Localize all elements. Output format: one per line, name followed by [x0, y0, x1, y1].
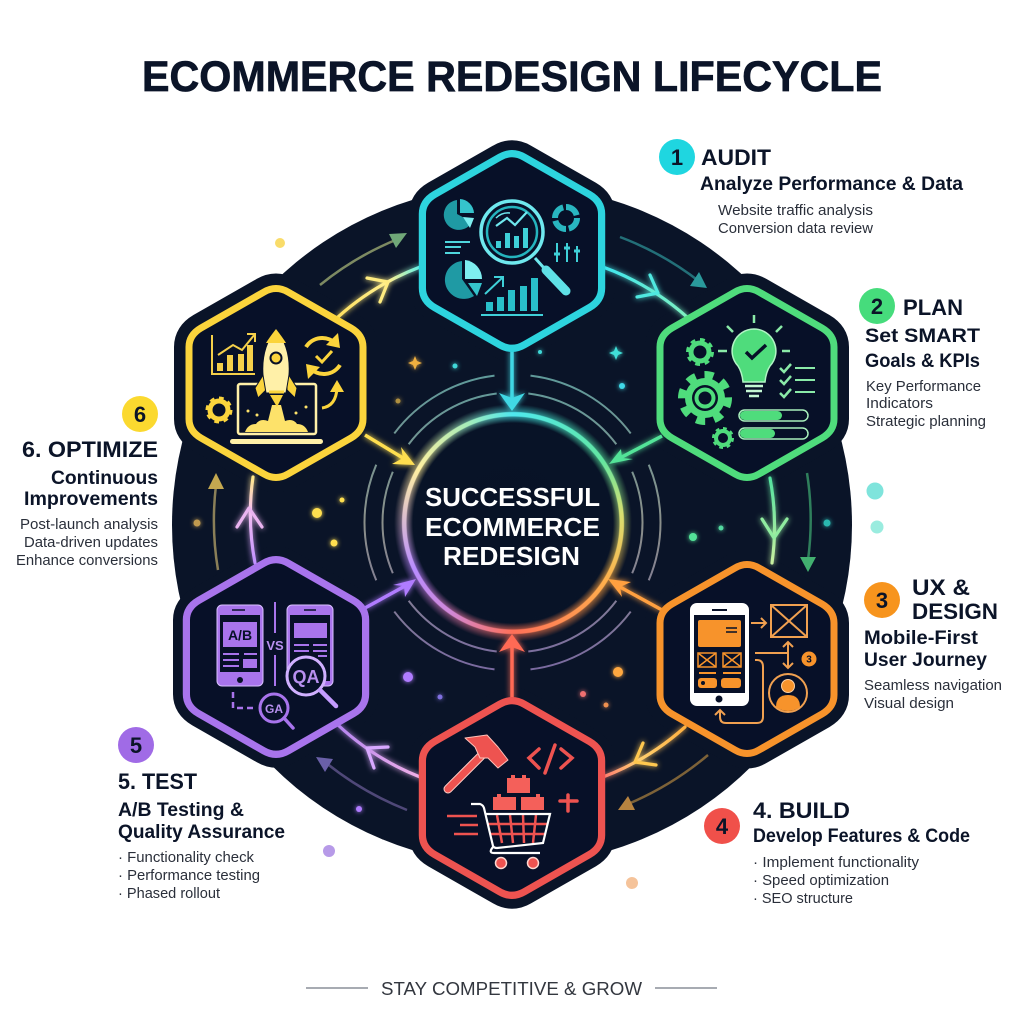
- icon: hammer, code and shopping cart: [447, 735, 577, 868]
- hexagon: optimize: [189, 288, 363, 478]
- step 1 text: audit: Analyze Performance & Data: [700, 174, 963, 195]
- step 2 text: plan: Indicators: [866, 395, 933, 412]
- step 1 text: audit: Conversion data review: [718, 220, 873, 237]
- step 3 text: ux and design: DESIGN: [912, 599, 998, 624]
- step 6 text: optimize: Continuous: [51, 468, 158, 489]
- step 5 text: test: A/B Testing &: [118, 800, 244, 821]
- floating dots outside the diagram: [275, 238, 884, 889]
- step 4 text: build: [704, 798, 970, 907]
- icon: rocket launching from laptop: [207, 329, 344, 444]
- step 1 text: audit: [659, 139, 963, 237]
- step 6 text: optimize: [16, 396, 158, 569]
- hexagon: audit: [422, 154, 602, 348]
- step 2 text: plan: Goals & KPIs: [865, 351, 980, 372]
- step 2 text: plan: Strategic planning: [866, 413, 986, 430]
- step 3 text: ux and design: Mobile-First: [864, 628, 979, 649]
- step 6 text: optimize: Enhance conversions: [16, 552, 158, 569]
- step 2 text: plan: [859, 288, 986, 430]
- step 5 text: test: 5. TEST: [118, 769, 198, 794]
- hexagon: plan: [660, 288, 834, 478]
- step 5 text: test: [118, 727, 285, 902]
- hub label: REDESIGN: [443, 541, 580, 571]
- footer tagline: STAY COMPETITIVE & GROW: [381, 979, 642, 999]
- step 3 text: ux and design: User Journey: [864, 650, 987, 671]
- badge 2: [859, 288, 895, 324]
- step 6 text: optimize: 6. OPTIMIZE: [22, 437, 158, 462]
- step 2 text: plan: Set SMART: [865, 326, 980, 347]
- icon: phone wireframe and user journey: 3: [806, 654, 812, 666]
- concentric arcs around the hub: [364, 374, 660, 670]
- step 3 text: ux and design: [864, 575, 1002, 712]
- icon: a/b phones and qa magnifiers: A/B: [228, 627, 252, 643]
- step 6 text: optimize: Data-driven updates: [24, 534, 158, 551]
- badge 1: 1: [671, 145, 683, 170]
- step 1 text: audit: AUDIT: [701, 145, 772, 170]
- badge 3: 3: [876, 588, 888, 613]
- hub ring: [398, 408, 628, 638]
- step 4 text: build: · SEO structure: [753, 890, 853, 907]
- spoke arrows to the hub: [365, 350, 662, 700]
- title: ECOMMERCE REDESIGN LIFECYCLE: [142, 53, 882, 101]
- step 3 text: ux and design: Seamless navigation: [864, 677, 1002, 694]
- step 6 text: optimize: Post-launch analysis: [20, 516, 158, 533]
- badge 6: 6: [134, 402, 146, 427]
- outer faint cycle arrows: [208, 233, 816, 810]
- step 4 text: build: · Speed optimization: [753, 872, 889, 889]
- step 1 text: audit: Website traffic analysis: [718, 202, 873, 219]
- step 2 text: plan: PLAN: [903, 295, 963, 320]
- step 2 text: plan: Key Performance: [866, 378, 981, 395]
- decorative sparkles: [194, 346, 830, 812]
- icon: analytics and magnifier: [444, 199, 580, 315]
- step 4 text: build: · Implement functionality: [753, 854, 920, 871]
- icon: a/b phones and qa magnifiers: [217, 602, 336, 728]
- badge 5: [118, 727, 154, 763]
- hexagon: build: [422, 701, 602, 895]
- icon: a/b phones and qa magnifiers: GA: [265, 702, 283, 716]
- step 5 text: test: · Performance testing: [118, 867, 260, 884]
- badge 4: 4: [716, 814, 729, 839]
- step 5 text: test: · Functionality check: [118, 849, 254, 866]
- badge 6: [122, 396, 158, 432]
- step 5 text: test: · Phased rollout: [118, 885, 221, 902]
- step 6 text: optimize: Improvements: [24, 489, 158, 510]
- hub label: [425, 482, 600, 571]
- hub label: SUCCESSFUL: [425, 482, 600, 512]
- hexagon: ux and design: [660, 564, 834, 754]
- hub disc: [406, 416, 620, 630]
- badge 2: 2: [871, 294, 883, 319]
- dark backdrop: disc with hexagon shoulders: [172, 154, 852, 895]
- step 4 text: build: 4. BUILD: [753, 798, 850, 823]
- badge 1: [659, 139, 695, 175]
- step 5 text: test: Quality Assurance: [118, 822, 285, 843]
- badge 4: [704, 808, 740, 844]
- icon: lightbulb, gears and checklist: [682, 315, 815, 448]
- step 4 text: build: Develop Features & Code: [753, 826, 970, 847]
- hub ring glow: [395, 405, 631, 641]
- badge 5: 5: [130, 733, 142, 758]
- inner bright cycle arrows: [237, 267, 787, 777]
- icon: a/b phones and qa magnifiers: QA: [292, 667, 320, 687]
- step 3 text: ux and design: UX &: [912, 575, 970, 600]
- icon: phone wireframe and user journey: [690, 603, 816, 723]
- step 3 text: ux and design: Visual design: [864, 695, 954, 712]
- icon: a/b phones and qa magnifiers: VS: [266, 638, 284, 653]
- hexagon: test: [186, 560, 366, 754]
- hub label: ECOMMERCE: [425, 512, 600, 542]
